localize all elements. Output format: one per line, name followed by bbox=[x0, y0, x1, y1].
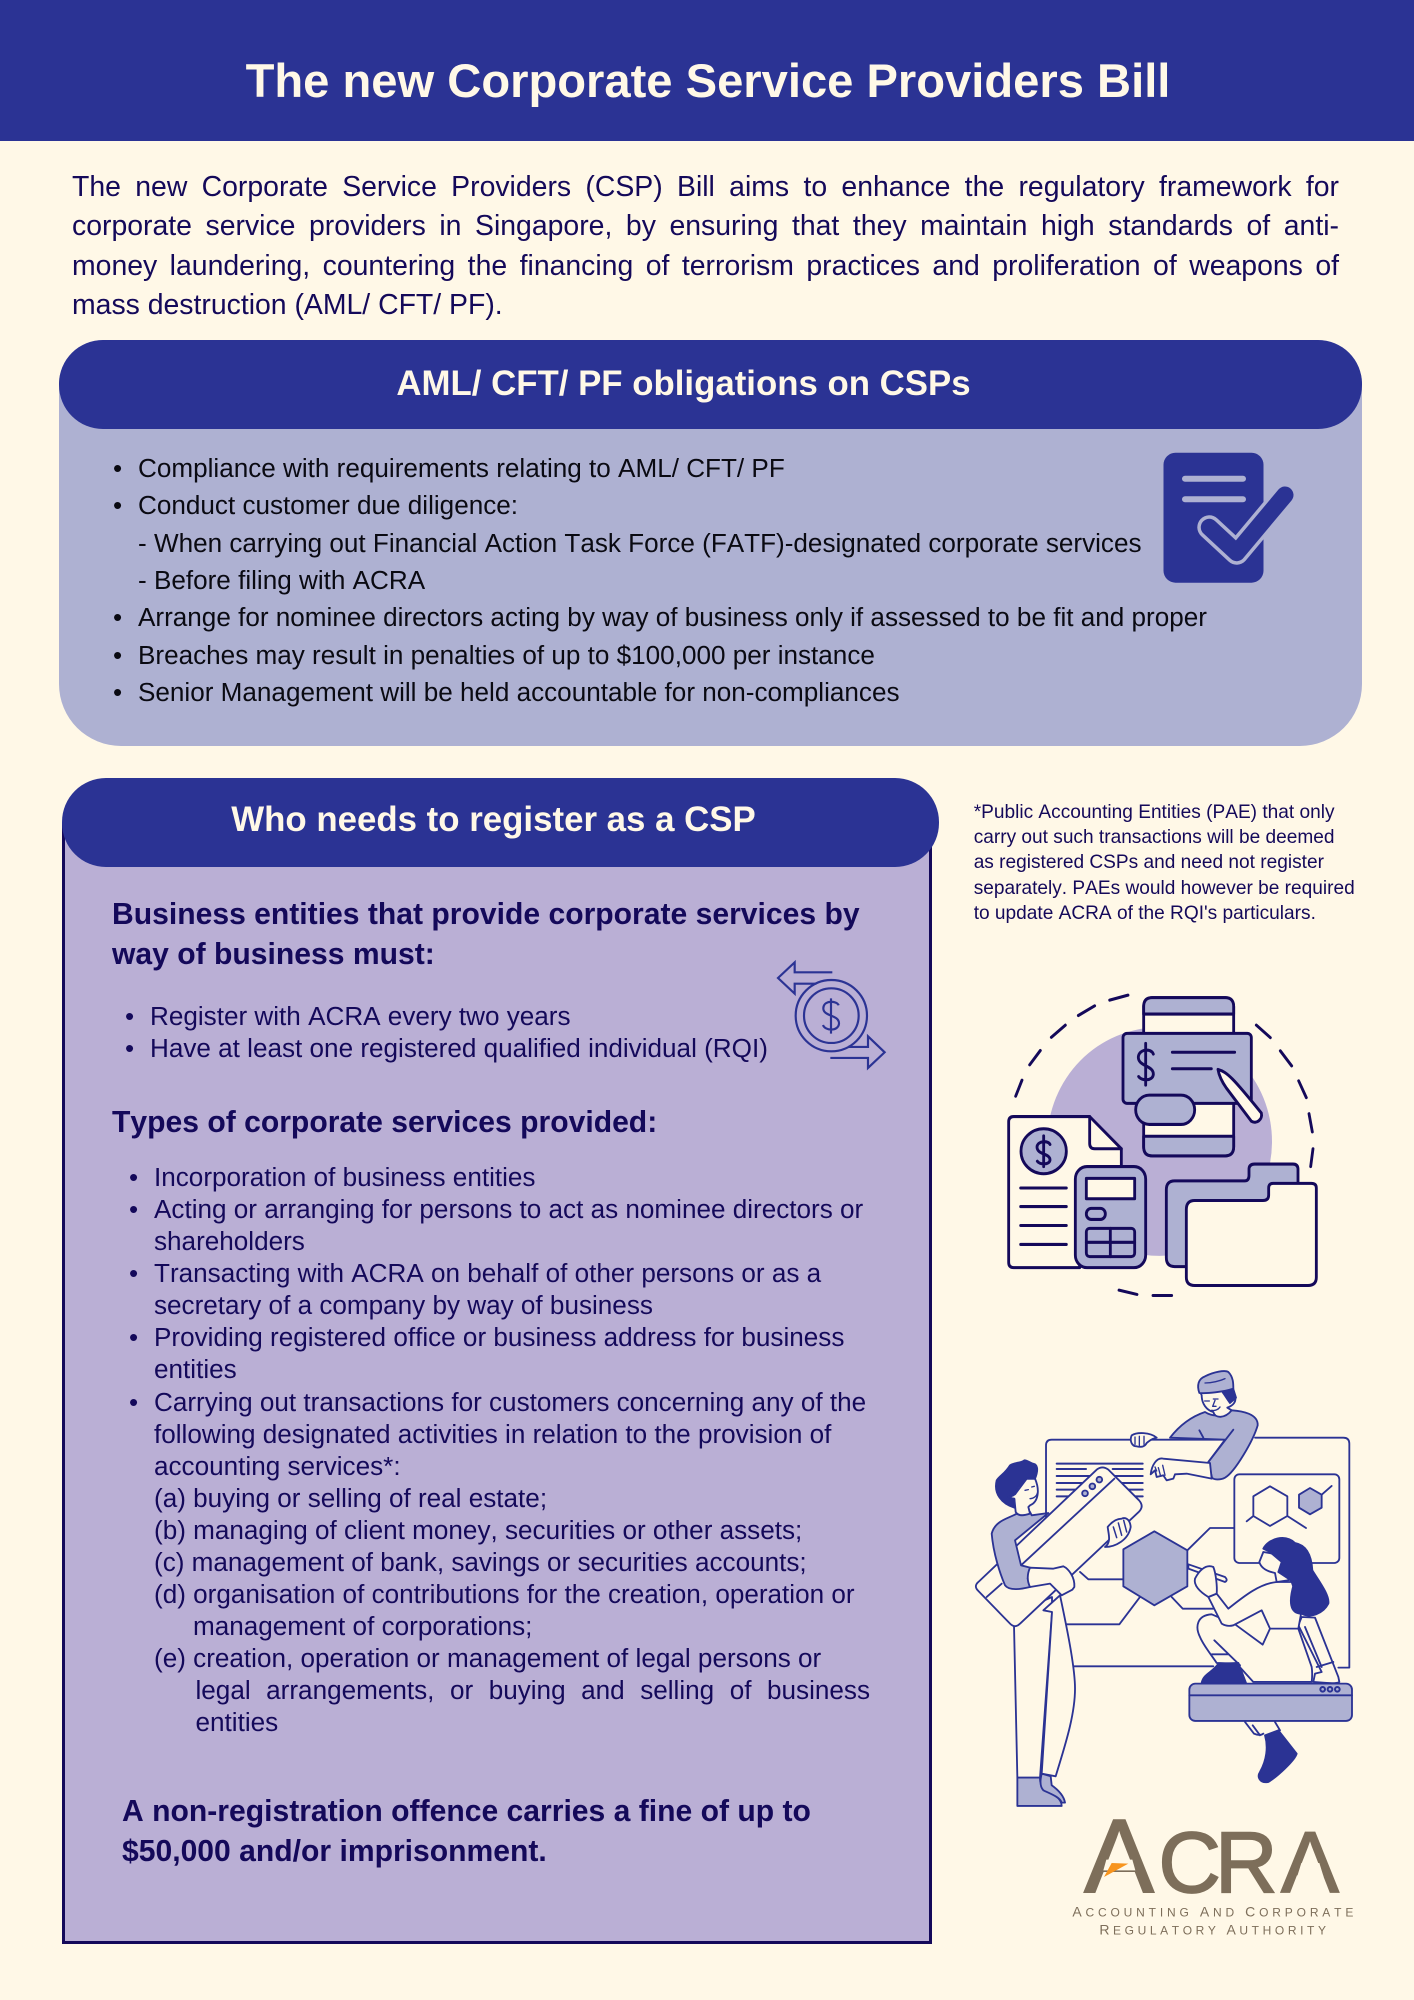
services list: Acting or arranging for persons to act as nominee directors or bbox=[154, 1194, 863, 1224]
registration requirements list bbox=[125, 1001, 768, 1063]
callout: non-registration offence bbox=[122, 1795, 811, 1868]
logo: ACRA: A bbox=[1281, 1815, 1339, 1911]
person: man with hat bbox=[1131, 1371, 1258, 1480]
panel: AML CFT PF obligations bbox=[59, 340, 1362, 746]
services list: (c) management of bank, savings or securities accounts; bbox=[154, 1547, 807, 1577]
icon: checklist document bbox=[1164, 452, 1294, 583]
registration requirements list: Have at least one registered qualified individual (RQI) bbox=[150, 1033, 768, 1063]
person: man with device bbox=[976, 1460, 1142, 1806]
services list: management of corporations; bbox=[193, 1611, 532, 1641]
intro paragraph: mass destruction (AML/ CFT/ PF). bbox=[72, 289, 503, 321]
services list: legal arrangements, or buying and selling of business bbox=[196, 1675, 870, 1705]
board bbox=[1046, 1437, 1349, 1667]
services list: Transacting with ACRA on behalf of other persons or as a bbox=[154, 1258, 821, 1288]
heading: types of services: Types of corporate services provided: bbox=[112, 1106, 657, 1139]
text: • bbox=[129, 1194, 138, 1224]
illustration: finance documents bbox=[1007, 994, 1318, 1297]
footnote: separately. PAEs would however be required bbox=[974, 878, 1355, 899]
services list bbox=[129, 1162, 870, 1737]
obligations list: Senior Management will be held accountable for non-compliances bbox=[138, 677, 900, 707]
panel heading: obligations: AML/ CFT/ PF obligations on CSPs bbox=[396, 364, 971, 403]
services list: entities bbox=[196, 1707, 278, 1737]
registration requirements list: Register with ACRA every two years bbox=[150, 1001, 571, 1031]
services list: (a) buying or selling of real estate; bbox=[154, 1483, 547, 1513]
heading: business entities: Business entities that provide corporate services by bbox=[112, 898, 860, 931]
services list: entities bbox=[154, 1354, 237, 1384]
logo: ACRA: C bbox=[1158, 1815, 1221, 1911]
obligations list: - When carrying out Financial Action Task Force (FATF)-designated corporate services bbox=[138, 528, 1142, 558]
text: • bbox=[129, 1387, 138, 1417]
obligations list: Breaches may result in penalties of up to $100,000 per instance bbox=[138, 640, 875, 670]
title: The new Corporate Service Providers Bill bbox=[246, 54, 1170, 107]
panel: AML CFT PF obligations: • bbox=[113, 602, 122, 632]
services list: (e) creation, operation or management of legal persons or bbox=[154, 1643, 821, 1673]
text: • bbox=[125, 1033, 134, 1063]
footnote: to update ACRA of the RQI's particulars. bbox=[974, 903, 1316, 924]
footnote: as registered CSPs and need not register bbox=[974, 852, 1324, 873]
logo: ACRA: A bbox=[1084, 1799, 1154, 1915]
logo: ACRA: ACCOUNTING AND CORPORATE bbox=[1072, 1904, 1353, 1920]
footnote bbox=[974, 802, 1355, 924]
footnote: carry out such transactions will be deemed bbox=[974, 827, 1335, 848]
panel: AML CFT PF obligations: • bbox=[113, 640, 122, 670]
obligations list: Compliance with requirements relating to AML/ CFT/ PF bbox=[138, 453, 785, 483]
obligations list: - Before filing with ACRA bbox=[138, 565, 425, 595]
title banner bbox=[0, 0, 1414, 141]
services list: Incorporation of business entities bbox=[154, 1162, 535, 1192]
panel body bbox=[62, 822, 932, 1944]
panel heading: register bbox=[62, 778, 939, 867]
text: • bbox=[125, 1001, 134, 1031]
services list: Providing registered office or business address for business bbox=[154, 1322, 844, 1352]
logo: ACRA: R bbox=[1215, 1815, 1278, 1911]
services list: following designated activities in relation to the provision of bbox=[154, 1419, 831, 1449]
services list: Carrying out transactions for customers concerning any of the bbox=[154, 1387, 866, 1417]
intro paragraph: money laundering, countering the financing of terrorism practices and proliferation of weapons of bbox=[72, 250, 1339, 282]
obligations list: Arrange for nominee directors acting by way of business only if assessed to be fit and proper bbox=[138, 602, 1207, 632]
services list: secretary of a company by way of business bbox=[154, 1290, 653, 1320]
text: • bbox=[129, 1162, 138, 1192]
panel heading: obligations bbox=[59, 340, 1362, 429]
panel: AML CFT PF obligations: • bbox=[113, 677, 122, 707]
callout: non-registration offence: A non-registration offence carries a fine of up to bbox=[122, 1795, 811, 1828]
logo: ACRA: REGULATORY AUTHORITY bbox=[1099, 1922, 1326, 1938]
intro paragraph: The new Corporate Service Providers (CSP) Bill aims to enhance the regulatory framework for bbox=[72, 171, 1339, 203]
panel heading: register: Who needs to register as a CSP bbox=[231, 800, 756, 839]
heading: business entities: way of business must: bbox=[112, 938, 435, 971]
footnote: *Public Accounting Entities (PAE) that only bbox=[974, 802, 1335, 823]
obligations list bbox=[113, 453, 1207, 707]
text: • bbox=[129, 1322, 138, 1352]
services list: shareholders bbox=[154, 1226, 305, 1256]
text: • bbox=[129, 1258, 138, 1288]
services list: accounting services*: bbox=[154, 1451, 401, 1481]
callout: non-registration offence: $50,000 and/or imprisonment. bbox=[122, 1835, 547, 1868]
obligations list: Conduct customer due diligence: bbox=[138, 490, 518, 520]
icon: currency exchange bbox=[776, 960, 886, 1070]
panel: AML CFT PF obligations: • bbox=[113, 453, 122, 483]
heading: business entities bbox=[112, 898, 860, 971]
services list: (b) managing of client money, securities or other assets; bbox=[154, 1515, 802, 1545]
panel: AML CFT PF obligations: • bbox=[113, 490, 122, 520]
person: woman drawing bbox=[1188, 1538, 1352, 1782]
logo: ACRA bbox=[1072, 1799, 1353, 1938]
intro paragraph bbox=[72, 171, 1340, 321]
services list: (d) organisation of contributions for the creation, operation or bbox=[154, 1579, 855, 1609]
illustration: team at a board bbox=[974, 1370, 1353, 1807]
intro paragraph: corporate service providers in Singapore, by ensuring that they maintain high standards of anti- bbox=[72, 210, 1339, 242]
